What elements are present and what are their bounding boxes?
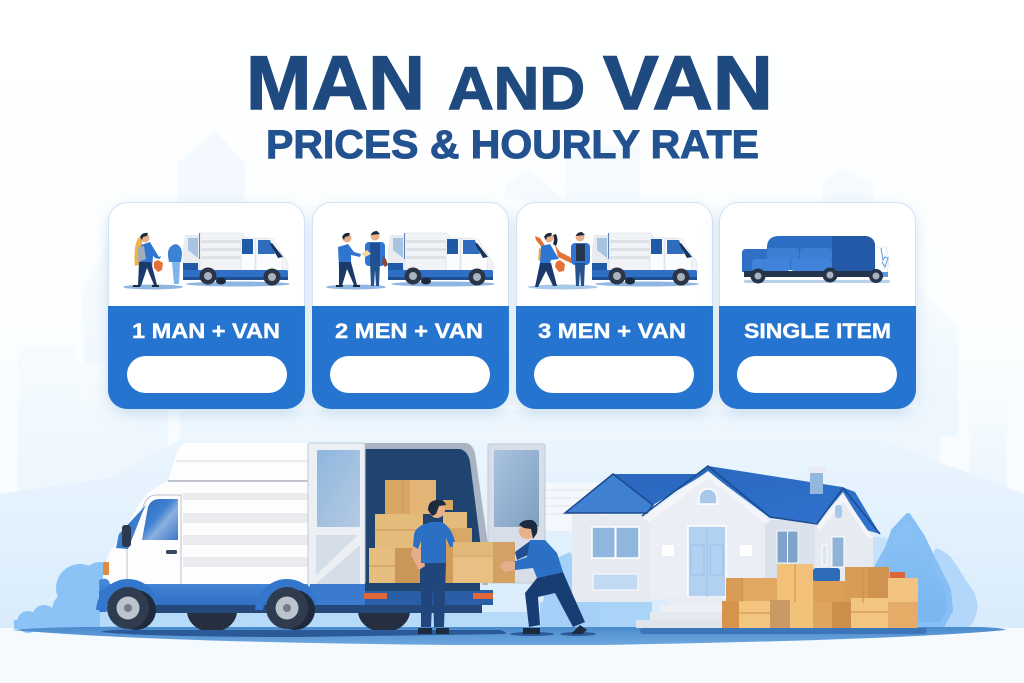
headlight	[103, 562, 109, 575]
hair	[519, 520, 537, 539]
stacked boxes by house	[640, 564, 927, 634]
torso	[513, 540, 563, 578]
mover in truck	[411, 500, 456, 634]
roof	[565, 466, 880, 538]
hidden rear wheels	[187, 590, 410, 632]
title	[246, 41, 773, 126]
title: AND	[448, 55, 585, 122]
foreground backdrop: bushes and trees	[14, 516, 975, 633]
label: 3 MEN + VAN	[538, 319, 686, 343]
left rear door	[308, 443, 365, 586]
subtitle: PRICES & HOURLY RATE	[266, 123, 759, 167]
blue figure	[168, 244, 182, 284]
cab window	[142, 499, 178, 540]
card: 2 men + van	[312, 202, 509, 409]
card: single item	[719, 202, 916, 409]
shirt	[413, 522, 456, 563]
title: MAN	[246, 41, 425, 126]
legs	[525, 572, 585, 627]
label: SINGLE ITEM	[744, 319, 891, 343]
card: 3 men + van	[516, 202, 713, 409]
mirror	[122, 525, 131, 547]
cargo interior	[365, 448, 484, 583]
body stripes	[176, 460, 308, 567]
background skyline	[18, 130, 1007, 502]
label: 1 MAN + VAN	[132, 319, 280, 343]
price pill	[534, 356, 694, 393]
hair	[428, 500, 446, 516]
right rear door	[488, 444, 545, 583]
carried box	[453, 542, 515, 583]
hand	[499, 561, 515, 572]
legs	[421, 562, 446, 627]
windshield	[116, 505, 146, 549]
windows and door	[592, 489, 844, 597]
head	[429, 502, 445, 518]
head	[519, 523, 535, 539]
walls	[572, 472, 873, 602]
ground	[12, 627, 1006, 645]
title: VAN	[603, 41, 773, 126]
house	[545, 466, 880, 628]
card: 1 man + van	[108, 202, 305, 409]
three workers	[528, 232, 598, 290]
arm	[411, 546, 425, 570]
background hills	[0, 440, 1024, 628]
van illustration	[388, 233, 495, 286]
two workers	[326, 231, 388, 290]
door handle	[166, 550, 177, 554]
blue band	[99, 579, 310, 605]
rear bumper	[310, 583, 493, 605]
van illustration	[592, 233, 699, 286]
van illustration	[183, 233, 290, 286]
price pill	[737, 356, 897, 393]
chimney	[807, 467, 826, 494]
mover pushing box	[499, 520, 596, 636]
price pill	[330, 356, 490, 393]
rear wheel	[255, 579, 318, 630]
van body	[101, 443, 310, 610]
shoes	[523, 625, 587, 634]
white building behind	[545, 483, 605, 531]
cab door	[127, 495, 181, 605]
label: 2 MEN + VAN	[335, 319, 483, 343]
sofa van illustration	[742, 236, 890, 284]
worker with bag	[123, 233, 183, 290]
steps	[636, 597, 722, 628]
price pill	[127, 356, 287, 393]
front wheel	[96, 579, 159, 630]
back arm	[515, 541, 535, 560]
cargo boxes	[369, 480, 472, 583]
van shadow	[100, 630, 506, 637]
large van	[96, 443, 545, 637]
shoes	[418, 628, 449, 634]
